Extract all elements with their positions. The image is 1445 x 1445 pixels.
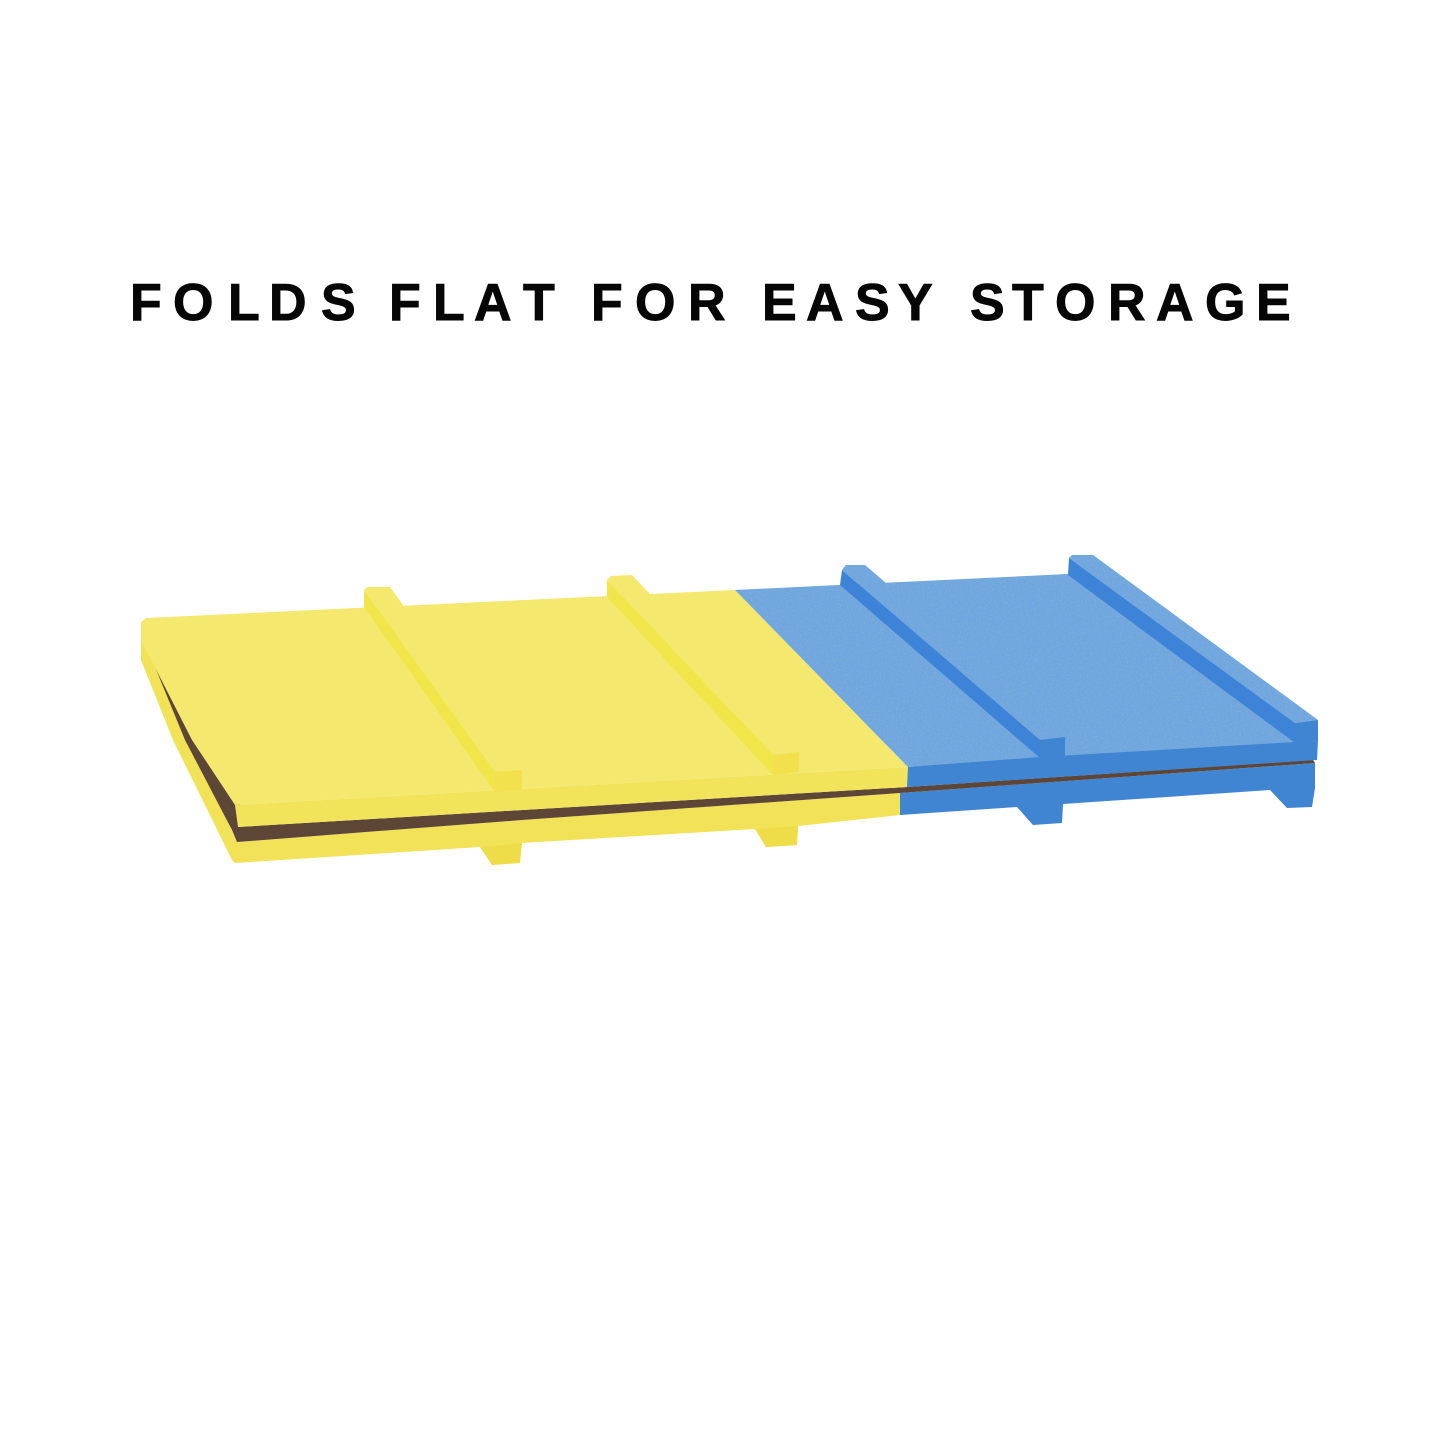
product photo: folded flat yellow and blue board [141,555,1318,865]
yellow rib 2 [607,575,799,775]
lower slab: blue [900,763,1315,825]
title: FOLDS FLAT FOR EASY STORAGE [130,274,1291,332]
top slab: yellow surface [141,590,908,805]
yellow rib 1 [363,587,522,792]
top slab: yellow front edge [235,767,908,827]
lower slab: yellow [141,640,900,865]
blue rib 4 [1068,555,1318,743]
gap between folded panels [146,645,1315,842]
top slab: blue surface [735,574,1295,767]
blue rib 3 [840,565,1065,758]
top slab: blue front edge [907,741,1318,787]
